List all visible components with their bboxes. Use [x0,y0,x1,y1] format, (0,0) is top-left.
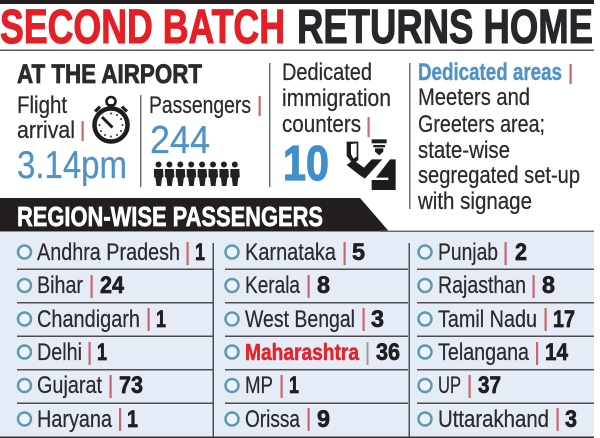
row: UP: 37 [478,372,501,399]
row: Bihar: Bihar [37,272,83,299]
text: meeters and greeters description: Greeters area; [418,111,545,138]
heading: dedicated areas: Dedicated areas [418,59,562,86]
row: Chandigarh: 1 [156,306,166,333]
row: Kerala: 8 [317,272,330,299]
row: Kerala: Kerala [245,272,301,299]
text: flight arrival: arrival [17,117,75,144]
row: Rajasthan: Rajasthan [438,272,526,299]
row: Rajasthan: 8 [542,272,555,299]
row: Punjab: Punjab [438,239,498,266]
row: Maharashtra: Maharashtra [245,339,359,365]
row: Delhi [18,339,107,366]
panel: dedicated areas [417,59,580,215]
icon: row of passengers [154,162,240,186]
row: Delhi: 1 [97,339,107,366]
text: meeters and greeters description [417,84,580,215]
row: Telangana: 14 [545,339,569,366]
row: Punjab: 2 [515,239,527,266]
row: Bihar: 24 [100,272,125,299]
text: flight arrival [17,92,127,187]
row: Gujarat [18,372,143,399]
row: Orissa: Orissa [245,406,301,433]
text: dedicated immigration counters [282,59,391,138]
text: dedicated immigration counters: immigration [282,85,391,112]
text: meeters and greeters description: Meeters and [418,84,530,111]
row: West Bengal: West Bengal [245,306,355,333]
row: Haryana: Haryana [37,406,113,433]
row: Telangana: Telangana [438,339,530,366]
text: meeters and greeters description: with signage [417,188,532,215]
row: Haryana: 1 [127,406,138,433]
text: passengers: Passengers [149,92,251,119]
title [0,1,593,54]
panel: region table [0,232,594,438]
row: Karnataka: 5 [352,239,365,266]
row: West Bengal: 3 [371,306,384,333]
icon: stopwatch [94,97,128,142]
row: Chandigarh: Chandigarh [37,306,140,333]
row: Uttarakhand: Uttarakhand [438,406,549,433]
text: passengers: 244 [150,119,210,162]
heading: at the airport: AT THE AIRPORT [17,59,202,89]
row: Uttarakhand: 3 [565,406,577,433]
row: Maharashtra: 36 [376,339,400,366]
number: 10 counters: 10 [283,137,329,191]
row: Tamil Nadu: 17 [553,306,575,333]
row: Kerala [226,272,330,299]
panel: immigration counters [282,59,396,191]
row: Bihar [18,272,125,299]
row: MP: MP [245,372,273,399]
icon: immigration officer [347,139,396,190]
row: Orissa: 9 [317,406,330,433]
panel: at the airport [17,59,261,187]
row: Andhra Pradesh: 1 [195,239,205,266]
title: SECOND BATCH [0,1,285,54]
text: dedicated immigration counters: counters [282,111,361,138]
row: Punjab [418,239,527,266]
row: Orissa [226,406,330,433]
text: flight arrival: Flight [17,92,67,119]
row: Gujarat: Gujarat [37,372,102,399]
row: UP: UP [438,372,461,399]
row: MP [226,372,299,399]
row: Andhra Pradesh: Andhra Pradesh [37,239,180,266]
text: flight arrival: 3.14pm [17,144,127,187]
text: passengers [149,92,261,162]
row: Delhi: Delhi [37,339,82,366]
row: UP [418,372,501,399]
row: Gujarat: 73 [119,372,143,399]
row: Tamil Nadu: Tamil Nadu [438,306,537,333]
row: MP: 1 [289,372,299,399]
banner: region-wise passengers: REGION-WISE PASSENGERS [17,201,323,232]
text: meeters and greeters description: state-wise [418,137,510,164]
row: Karnataka: Karnataka [245,239,337,266]
text: dedicated immigration counters: Dedicated [282,59,372,86]
